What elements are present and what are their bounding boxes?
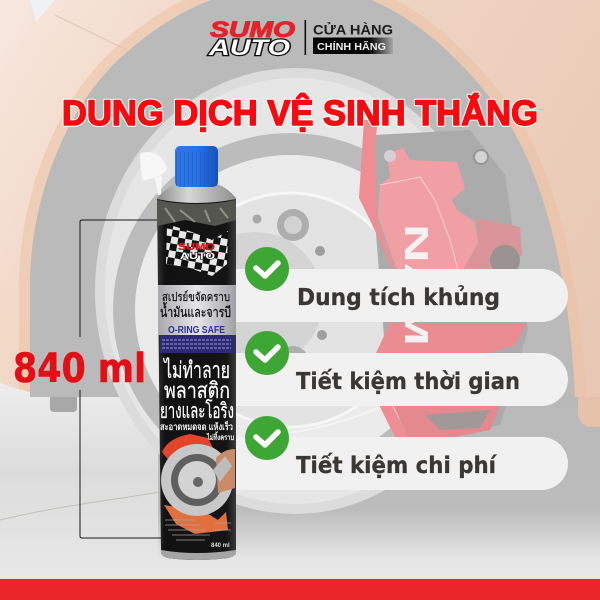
- bracket: bottle height: [80, 220, 161, 538]
- volume on can: 840 ml: [211, 543, 230, 549]
- pill 2: [160, 353, 568, 406]
- caliper details: [490, 245, 520, 275]
- red caliper outer band: [359, 120, 408, 437]
- can headline: ไม่ทิ้งคราบ: [206, 431, 234, 442]
- logo: store tagline: CỬA HÀNG: [313, 20, 393, 38]
- underbody shadow: [158, 397, 600, 557]
- logo: store tagline: [313, 20, 393, 54]
- can body: [157, 199, 236, 560]
- can photo: brake disc: [161, 434, 235, 534]
- arch glow: [30, 0, 575, 397]
- blue cap: [175, 146, 218, 187]
- logo: [208, 17, 393, 60]
- footer bar: [0, 579, 600, 600]
- caliper pocket: [375, 130, 528, 437]
- can headline: สะอาดหมดจด แห้งเร็ว: [160, 420, 233, 433]
- tyre sidewall: [95, 68, 495, 514]
- logo: SUMO AUTO wordmark: [208, 17, 295, 60]
- caliper right section: [463, 218, 522, 270]
- spray bottle: AUTO: [180, 251, 215, 262]
- caliper lettering: NAM: [398, 224, 435, 346]
- pill 3: [160, 437, 568, 490]
- spray bottle: [140, 146, 236, 560]
- can base rim: [161, 550, 236, 560]
- can headline: [160, 357, 234, 442]
- icon: check 1: [245, 247, 289, 291]
- benefit row 2: [160, 331, 568, 406]
- dark band: [113, 133, 467, 487]
- can brand: SUMO: [178, 241, 215, 253]
- icon: check 3: [245, 416, 289, 460]
- logo: SUMO AUTO wordmark: AUTO: [208, 35, 290, 60]
- benefit text 2: Tiết kiệm thời gian: [296, 367, 520, 395]
- white nozzle: [140, 152, 167, 195]
- icon: check 2: [245, 331, 289, 375]
- title: DUNG DỊCH VỆ SINH THẮNG: [62, 93, 538, 133]
- benefit row 3: [160, 416, 568, 490]
- checkered flag: [166, 224, 228, 276]
- brake disc: [135, 155, 445, 465]
- benefit row 1: [160, 247, 568, 322]
- can headline: ยางและโอริง: [160, 399, 234, 423]
- logo: SUMO AUTO wordmark: SUMO: [210, 17, 295, 42]
- purple strip: [160, 335, 234, 353]
- volume label: 840 ml: [13, 346, 146, 392]
- title: DUNG DỊCH VỆ SINH THẮNG: [62, 93, 538, 133]
- spray bottle: สเปรย์ขจัดคราบ: [162, 290, 230, 304]
- can headline: พลาสติก: [164, 378, 230, 403]
- wheel arch: [30, 0, 575, 397]
- spray bottle: น้ำมันและจารบี: [160, 302, 231, 320]
- pill 1: [160, 269, 568, 322]
- mud flap: [50, 397, 77, 412]
- can marbled top: [157, 200, 236, 226]
- ground: [0, 383, 600, 582]
- can headline: ไม่ทำลาย: [163, 357, 230, 383]
- benefit text 1: Dung tích khủng: [297, 283, 500, 311]
- can small print: [165, 520, 231, 540]
- metal shoulder: [157, 184, 236, 208]
- O-ring safe: O-RING SAFE: [168, 324, 225, 336]
- logo: store tagline: CHÍNH HÃNG: [317, 40, 386, 53]
- caliper pad: [378, 148, 478, 270]
- can silver label: [158, 285, 236, 335]
- benefit text 3: Tiết kiệm chi phí: [296, 451, 498, 479]
